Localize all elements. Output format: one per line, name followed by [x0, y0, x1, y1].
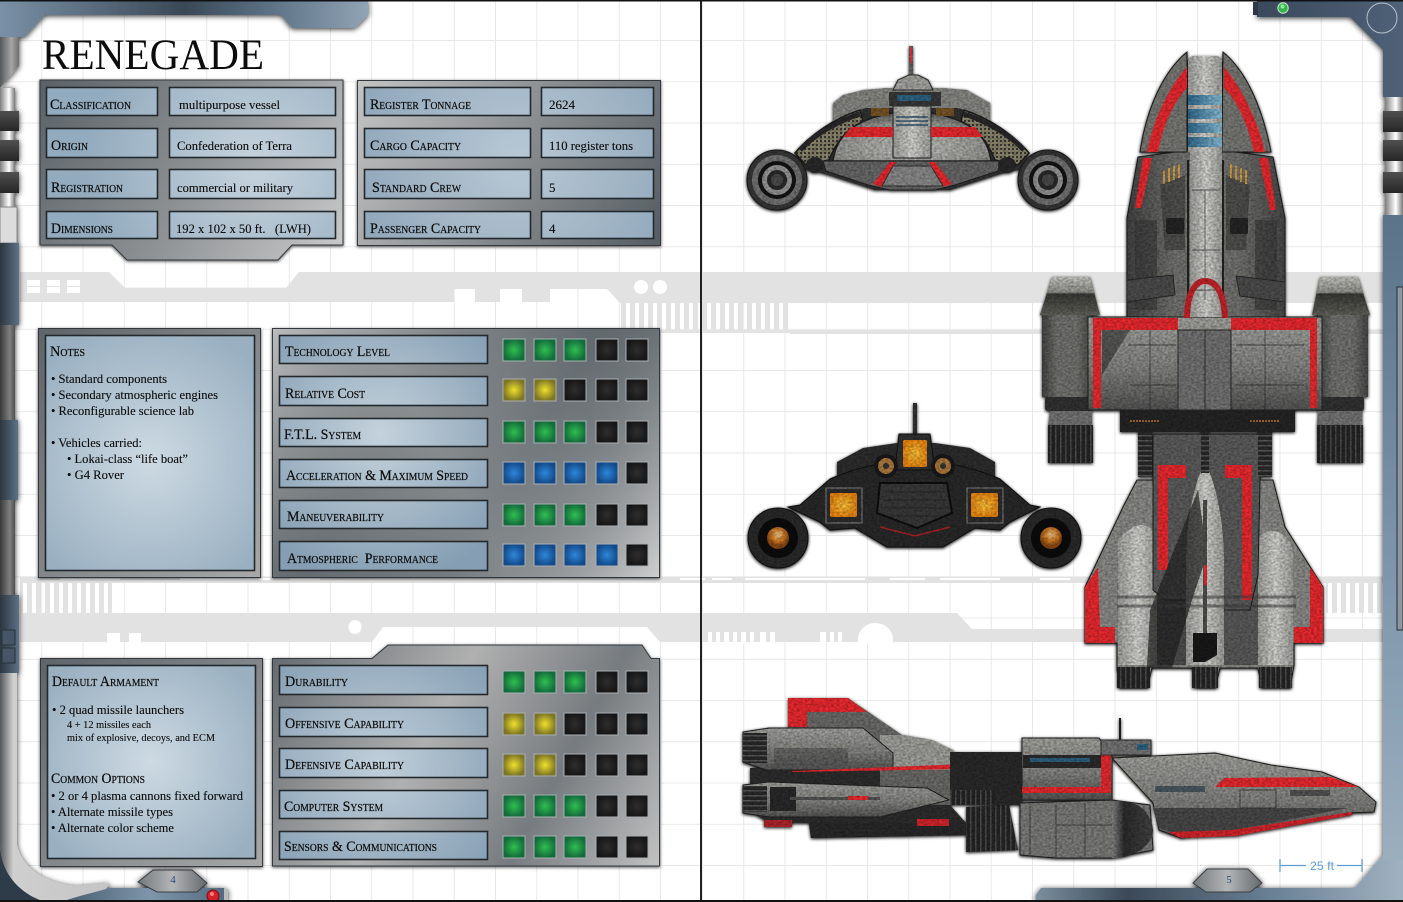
- lateral bands: [1117, 597, 1296, 606]
- frame: left column studs: [0, 88, 19, 243]
- dark rear underbody: [750, 768, 966, 838]
- main hull dome: [833, 113, 991, 161]
- row: passenger capacity: 4: [549, 222, 556, 236]
- left wheel: [748, 508, 808, 568]
- frame: lower left blue section: [0, 595, 19, 673]
- decorative grey band: upper: [20, 272, 1383, 334]
- frame: left column grey section: [0, 325, 18, 595]
- engine hub dark shell: [1112, 801, 1153, 858]
- text: options list: • Alternate missile types: [51, 805, 173, 819]
- row: registration: [46, 170, 336, 198]
- row: standard crew: Standard Crew: [372, 180, 462, 196]
- mid body: [880, 735, 1000, 805]
- row: classification: multipurpose vessel: [179, 98, 280, 112]
- rating: sensors and communications: Sensors & Communications: [284, 839, 437, 855]
- red trim line: [792, 764, 966, 772]
- rating: ftl system: F.T.L. System: [284, 427, 361, 443]
- rating: acceleration: Acceleration & Maximum Speed: [286, 468, 468, 484]
- hull panel lines and windows: [1155, 786, 1330, 808]
- row: register tonnage: 2624: [549, 98, 576, 112]
- ship: front view: [747, 46, 1078, 210]
- springs: [1138, 428, 1272, 477]
- under bar lights: [1130, 420, 1280, 422]
- row: classification: [46, 88, 336, 116]
- rating: maneuverability: [280, 500, 648, 528]
- centre spine: [1193, 500, 1217, 662]
- rating: maneuverability: Maneuverability: [287, 509, 384, 525]
- panel: combat ratings: [272, 645, 660, 866]
- tail fin: [788, 698, 902, 745]
- rear engine pods: [1118, 525, 1293, 665]
- row: dimensions: 192 x 102 x 50 ft. (LWH): [176, 222, 311, 236]
- row: dimensions: Dimensions: [51, 221, 113, 237]
- row: dimensions: [46, 212, 336, 238]
- row: origin: Confederation of Terra: [177, 139, 292, 153]
- frame: page tab: [138, 870, 207, 892]
- left engine nacelle: [1040, 277, 1100, 463]
- left wheel: [747, 150, 807, 210]
- frame: green indicator light: [1253, 2, 1288, 15]
- frame: round detail: [1367, 3, 1397, 33]
- right engine: [967, 488, 1003, 523]
- row: passenger capacity: Passenger Capacity: [370, 221, 481, 237]
- rear wings: [833, 88, 990, 125]
- nose windows: [1188, 95, 1222, 147]
- rating: relative cost: [280, 376, 648, 406]
- frame: top corner: [1257, 0, 1403, 97]
- rating: computer system: [280, 790, 648, 818]
- dark underbody: [800, 108, 1025, 190]
- hull red keel: [1168, 812, 1352, 838]
- window band: [1023, 755, 1101, 768]
- rating: sensors and communications: [280, 832, 648, 860]
- heading: common options: Common Options: [51, 771, 145, 787]
- engine hub panel lines: [1030, 803, 1112, 857]
- centre column: [893, 106, 931, 158]
- red mid stripes: [1135, 158, 1276, 210]
- panel: identity specs: [40, 80, 343, 260]
- dark coupling: [950, 752, 1022, 805]
- rating: acceleration: [280, 460, 648, 488]
- rear wide hull: [1085, 480, 1323, 688]
- nose red stripes: [1147, 67, 1265, 152]
- row: registration: Registration: [51, 180, 123, 196]
- heading: default armament: Default Armament: [52, 674, 159, 690]
- heading: notes: Notes: [50, 344, 85, 360]
- scale bar: [1280, 859, 1362, 873]
- row: passenger capacity: [364, 212, 654, 238]
- frame: bottom bar: [1036, 855, 1403, 902]
- centre spine pod: [1186, 465, 1224, 665]
- text: notes list: [51, 372, 218, 482]
- row: register tonnage: Register Tonnage: [370, 97, 471, 113]
- bridge: [889, 75, 941, 106]
- frame: red indicator: [207, 889, 228, 902]
- panel: notes: [38, 328, 260, 578]
- rear nozzles: [1117, 667, 1292, 688]
- row: origin: Origin: [51, 138, 88, 154]
- frame: top bar: [0, 0, 368, 37]
- central plate: [877, 483, 952, 528]
- right engine nacelle: [1312, 277, 1370, 463]
- decorative grey band: lower: [20, 577, 1384, 643]
- row: cargo capacity: Cargo Capacity: [370, 138, 461, 154]
- rear wings: [837, 443, 995, 480]
- rating: atmospheric performance: [280, 542, 648, 570]
- rating: relative cost: Relative Cost: [285, 386, 365, 402]
- text: options list: • 2 or 4 plasma cannons fixed forward: [51, 789, 244, 803]
- red dome stripe: [843, 127, 983, 187]
- rear central block: [1153, 434, 1260, 610]
- centre spine upper: [1190, 152, 1222, 317]
- frame: left column blue section: [0, 243, 19, 325]
- rating: durability: Durability: [285, 674, 348, 690]
- left engine: [826, 488, 862, 523]
- underside pods: [806, 157, 1016, 173]
- main cross section: [1088, 317, 1322, 410]
- left page frame: [0, 0, 368, 902]
- text: options list: [51, 789, 244, 835]
- lower hull: [823, 161, 1000, 190]
- nose centre: [1188, 56, 1222, 152]
- panel: performance ratings: [272, 328, 660, 578]
- lower hull deck: [882, 166, 943, 186]
- right vent: [931, 454, 955, 478]
- row: registration: commercial or military: [177, 181, 294, 195]
- antenna: [909, 46, 913, 76]
- frame: curved metal corner: [0, 673, 110, 902]
- text: armament list: mix of explosive, decoys, and ECM: [67, 733, 215, 744]
- missile bays: [1163, 164, 1248, 234]
- rear dark shadow: [1147, 490, 1207, 668]
- frame: studs: [1383, 97, 1403, 215]
- rating: offensive capability: Offensive Capability: [285, 716, 404, 732]
- tower: [1101, 718, 1151, 755]
- red cross-section frame: [1093, 318, 1317, 408]
- rating: ftl system: [280, 418, 648, 446]
- centre page divider: [700, 0, 702, 902]
- nose left petal: [1140, 52, 1187, 152]
- frame: page tab: 4: [170, 874, 176, 886]
- bottom rail: [764, 819, 966, 838]
- panel: armament: [40, 658, 262, 866]
- frame: right column and bottom bar: [1355, 215, 1403, 902]
- cross section shading: [1102, 330, 1130, 375]
- under bar: [1120, 410, 1295, 432]
- central block: [1022, 738, 1112, 800]
- column dark panels: [1135, 175, 1277, 310]
- rear lower engine: [743, 782, 949, 817]
- row: origin: [46, 128, 336, 158]
- frame: bottom blue bar: [60, 888, 224, 902]
- cross section panel lines: [1128, 330, 1304, 410]
- text: notes list: • Secondary atmospheric engines: [51, 388, 218, 402]
- rating: atmospheric performance: Atmospheric Performance: [287, 551, 438, 567]
- coupling ribs: [950, 790, 995, 805]
- row: cargo capacity: [364, 128, 654, 158]
- text: options list: • Alternate color scheme: [51, 821, 174, 835]
- text: notes list: • Lokai-class “life boat”: [67, 452, 188, 466]
- rating: technology level: [280, 336, 648, 364]
- text: armament list: • 2 quad missile launchers: [52, 703, 184, 717]
- frame: page tab: [1193, 869, 1262, 892]
- antenna: [913, 403, 917, 437]
- row: standard crew: [364, 170, 654, 198]
- column collars: [1127, 275, 1285, 302]
- text: notes list: • Vehicles carried:: [51, 436, 142, 450]
- text: notes list: • Reconfigurable science lab: [51, 404, 194, 418]
- rating: durability: [280, 666, 648, 694]
- row: register tonnage: [364, 88, 654, 116]
- frame: page tab: 5: [1226, 874, 1232, 886]
- title: RENEGADE: [42, 32, 264, 79]
- mid body lower: [880, 770, 1000, 805]
- scale bar: 25 ft: [1310, 859, 1335, 873]
- top engine: [895, 434, 935, 470]
- right truss: [961, 110, 1029, 165]
- ship: side view: [743, 698, 1376, 858]
- right wheel: [1018, 150, 1078, 210]
- red arch: [1187, 281, 1225, 318]
- engine hub ribbed: [966, 805, 1018, 852]
- rating: defensive capability: [280, 748, 648, 778]
- red rear stripes: [1158, 465, 1252, 600]
- rating: computer system: Computer System: [284, 799, 383, 815]
- right wheel: [1021, 508, 1081, 568]
- hull red strip: [1215, 777, 1359, 787]
- central door: [1178, 330, 1231, 410]
- row: standard crew: 5: [549, 181, 555, 195]
- text: armament list: 4 + 12 missiles each: [67, 720, 151, 731]
- ship: rear view: [748, 403, 1081, 568]
- text: notes list: • G4 Rover: [67, 468, 125, 482]
- plate lines: [881, 492, 950, 516]
- red trim: [880, 527, 950, 536]
- red rear wings: [1085, 567, 1323, 643]
- right page frame: [1036, 0, 1403, 902]
- tail red: [788, 698, 867, 727]
- rear upper engine: [743, 728, 893, 770]
- text: armament list: [52, 703, 215, 744]
- left vent: [874, 454, 898, 478]
- column above cross section: [1127, 150, 1285, 317]
- ship: top view: [1040, 52, 1370, 688]
- left truss: [795, 110, 863, 165]
- spine panel lines: [1192, 190, 1220, 300]
- central red L: [1022, 753, 1111, 793]
- text: notes list: • Standard components: [51, 372, 167, 386]
- frame: inner rail: [1397, 287, 1403, 630]
- frame: corner fill: [0, 850, 48, 902]
- spine dark edges: [1188, 160, 1223, 300]
- missile tubes: [871, 108, 954, 116]
- column rib lines: [896, 117, 928, 125]
- frame: left column upper: [0, 37, 19, 88]
- row: cargo capacity: 110 register tons: [549, 139, 633, 153]
- panel: capacity specs: [358, 80, 660, 246]
- row: classification: Classification: [50, 97, 131, 113]
- nose right petal: [1222, 52, 1271, 152]
- engine hub body: [1020, 800, 1153, 858]
- rating: offensive capability: [280, 708, 648, 736]
- forward hull lower dark: [1153, 808, 1348, 835]
- main hull: [788, 462, 1040, 547]
- rating: defensive capability: Defensive Capability: [285, 757, 404, 773]
- rating: technology level: Technology Level: [285, 344, 390, 360]
- forward hull: [1112, 753, 1376, 838]
